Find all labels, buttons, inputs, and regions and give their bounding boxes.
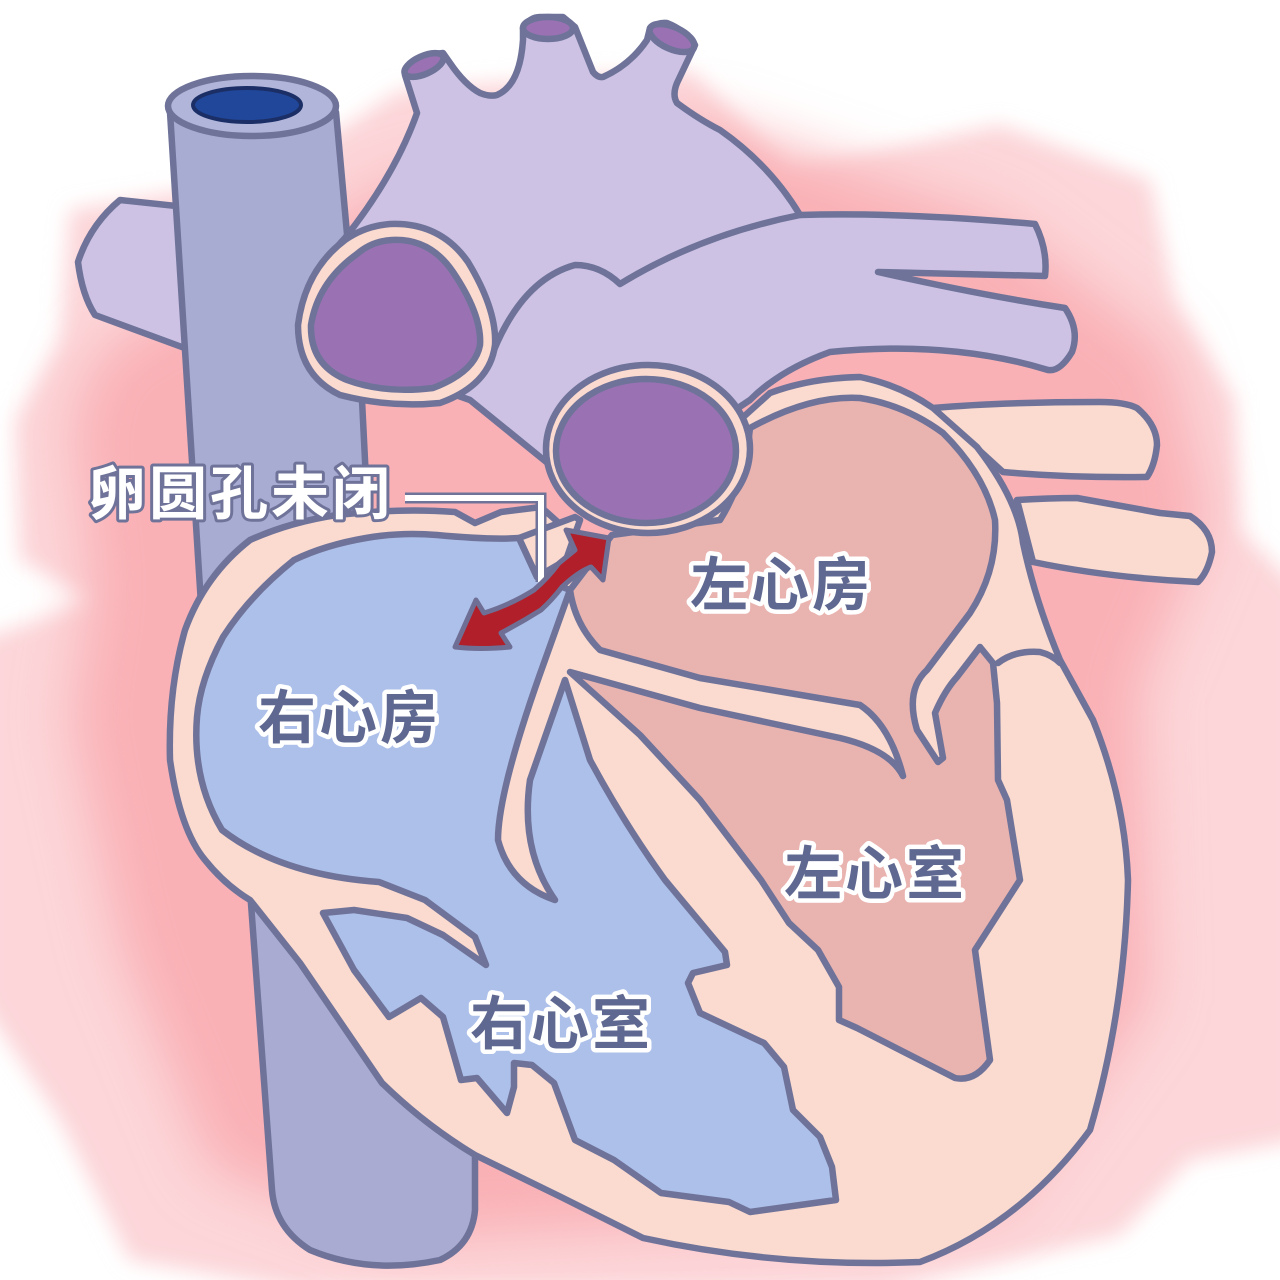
great vessel section left xyxy=(298,224,495,404)
right pulmonary veins xyxy=(933,402,1212,582)
label: patent foramen ovale: 卵圆孔未闭 xyxy=(88,462,393,527)
great vessel section right xyxy=(546,365,750,533)
label: left atrium: 左心房 xyxy=(690,553,873,618)
lower vena cava xyxy=(250,890,475,1266)
left atrium and left ventricle xyxy=(570,398,1020,1079)
vessel opening middle xyxy=(523,17,573,39)
label: left ventricle: 左心室 xyxy=(784,842,967,907)
double arrow: shunt through foramen ovale xyxy=(455,530,609,648)
heart outer wall xyxy=(170,377,1128,1263)
upper vena cava xyxy=(168,76,370,620)
aorta and pulmonary artery xyxy=(300,17,1075,500)
vessel opening right xyxy=(646,18,698,58)
label: right ventricle: 右心室 xyxy=(470,992,653,1057)
right atrium and right ventricle xyxy=(196,534,836,1212)
vessel opening left xyxy=(401,48,447,82)
left pulmonary artery branch xyxy=(78,200,195,350)
label: right atrium: 右心房 xyxy=(258,686,441,751)
label pointer line xyxy=(405,498,541,582)
atrial septum wedge xyxy=(519,517,580,577)
myocardium arc xyxy=(998,652,1060,663)
